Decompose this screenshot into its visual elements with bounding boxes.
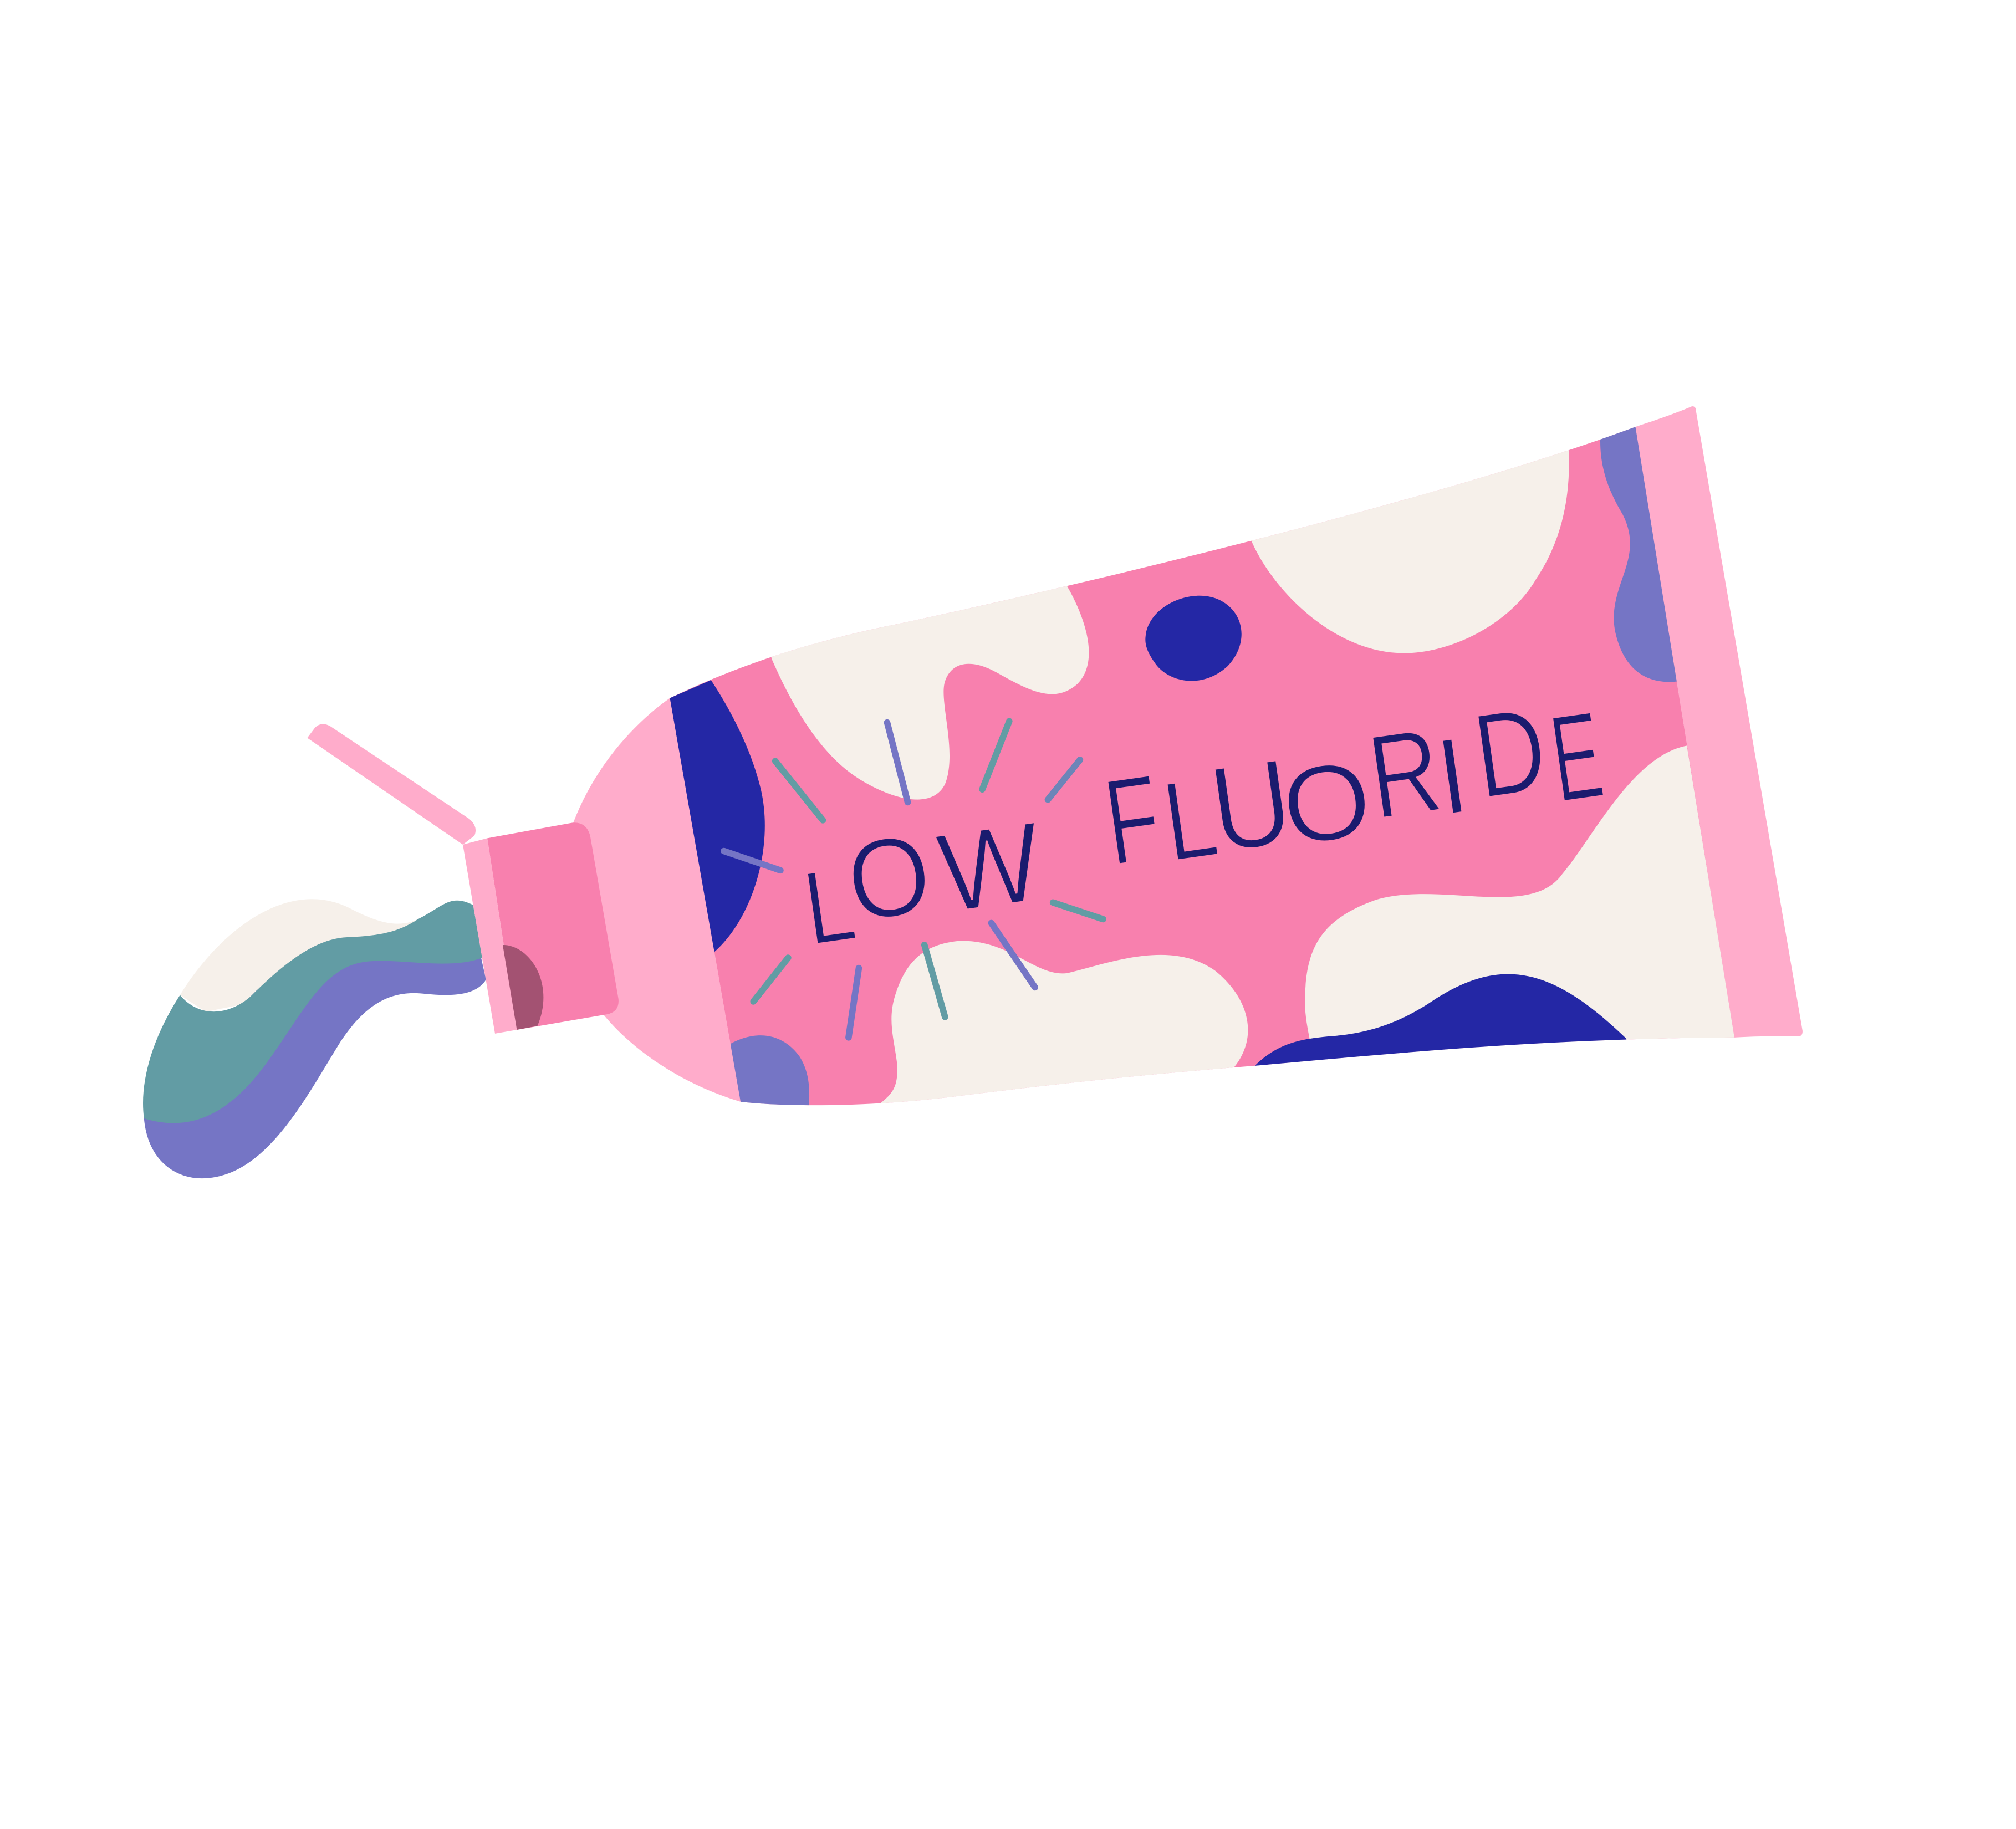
tube crimped end [1635,406,1803,1038]
tube body base [670,427,1734,1105]
blob: cream top right [1252,450,1569,653]
cap flap [307,724,476,845]
blob: cream top left [772,586,1089,800]
cap: main face [487,822,619,1030]
label: LOW FLUORIDE: I [1429,715,1476,838]
label: LOW FLUORIDE: L [797,845,862,967]
tube body with blobs [670,427,1734,1105]
cap: light strip [463,838,517,1034]
label: LOW FLUORIDE: W [931,799,1049,937]
label: LOW FLUORIDE: O [840,810,938,946]
cap [463,822,619,1034]
tube shoulder [571,698,741,1102]
blob: cream lower middle [881,941,1248,1118]
blob: periwinkle right [1600,418,1678,682]
label: LOW FLUORIDE: R [1361,703,1449,844]
toothpaste: cream stripe [180,899,418,1011]
label: LOW FLUORIDE: L [1156,754,1224,885]
cap: shadow [503,945,543,1030]
blob: navy left [670,680,765,953]
toothpaste: teal stripe [143,901,482,1123]
label: LOW FLUORIDE: U [1202,733,1300,878]
blob: navy lower right [1255,974,1626,1066]
illustration: low fluoride toothpaste tube [143,406,1803,1178]
label: LOW FLUORIDE: O [1275,737,1379,869]
label: LOW FLUORIDE: E [1543,684,1610,828]
label: LOW FLUORIDE: D [1466,681,1554,824]
label: LOW FLUORIDE [797,681,1610,967]
blob: periwinkle lower left [730,1035,809,1112]
label: LOW FLUORIDE: F [1097,749,1168,891]
blob: cream lower right [1298,745,1734,1062]
blob: navy dot [1145,596,1242,681]
toothpaste: periwinkle stripe [144,938,486,1178]
toothpaste squeezed out [143,899,486,1178]
sparkle ticks [724,721,1103,1038]
